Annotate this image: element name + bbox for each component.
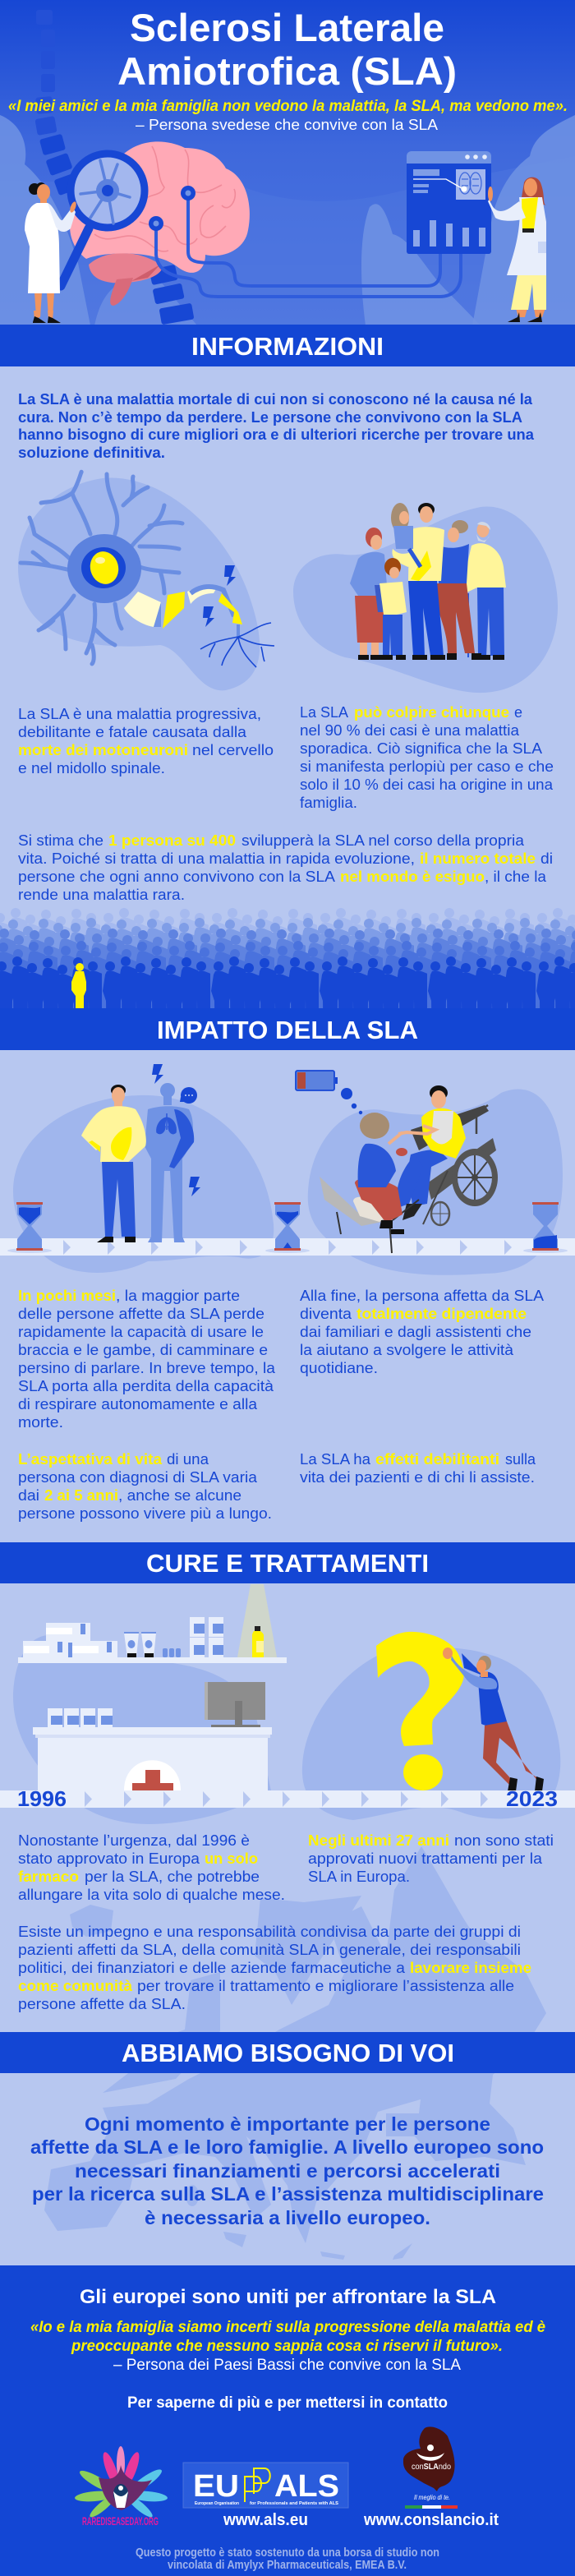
text block: one drug approved: un solo xyxy=(205,1850,258,1867)
text block: progressive disease: debilitante e fatale causata dalla xyxy=(18,724,247,740)
text block: intro: hanno bisogno di cure migliori ora e di ulteriori ricerche per trovare una xyxy=(18,426,535,443)
panel: footer xyxy=(0,2265,575,2576)
text block: 1 in 400: , il che la xyxy=(485,869,547,885)
woman left xyxy=(350,528,388,660)
text block: debilitating effects: vita dei pazienti e di chi li assiste. xyxy=(300,1469,535,1486)
text block: 1 in 400: svilupperà la SLA nel corso della propria xyxy=(242,832,525,849)
illustration: family xyxy=(293,503,558,693)
text block: shared commitment: Esiste un impegno e una responsabilità condivisa da parte dei gruppi di xyxy=(18,1924,521,1940)
text block: shared commitment xyxy=(18,1924,531,2012)
title xyxy=(117,6,457,93)
text block: 1 in 400: di xyxy=(540,850,553,867)
text block: life expectancy: di una xyxy=(167,1451,209,1468)
text block: progressive disease: morte dei motoneuroni xyxy=(18,742,188,758)
logo: EUpALS xyxy=(183,2463,348,2508)
heading: Abbiamo bisogno di voi: ABBIAMO BISOGNO DI VOI xyxy=(122,2039,454,2067)
text block: anyone can be affected: solo il 10 % dei casi ha origine in una xyxy=(300,776,554,793)
links xyxy=(223,2511,499,2529)
text block: within months: delle persone affette da SLA perde xyxy=(18,1306,264,1322)
logo: EUpALS: European Organisation xyxy=(195,2501,239,2506)
icon: hourglass middle xyxy=(265,1202,310,1253)
disclaimer: vincolata di Amylyx Pharmaceuticals, EMEA B.V. xyxy=(168,2559,407,2572)
quote: Dutch person: «Io e la mia famiglia siamo incerti sulla progressione della malattia ed è xyxy=(30,2319,545,2336)
illustration: crowd silhouettes xyxy=(0,908,575,1011)
quote: Swedish person: – Persona svedese che convive con la SLA xyxy=(136,116,439,133)
quote: Dutch person: – Persona dei Paesi Bassi che convive con la SLA xyxy=(113,2357,461,2374)
text block: life expectancy: L’aspettativa di vita xyxy=(18,1451,163,1468)
text block: within months: SLA porta alla perdita della capacità xyxy=(18,1378,274,1394)
text block: call to action: per la ricerca sulla SLA e l’assistenza multidisciplinare xyxy=(32,2183,544,2205)
links: www.conslancio.it xyxy=(363,2511,499,2529)
text block: totally dependent: dai familiari e dagli assistenti che xyxy=(300,1324,531,1340)
text block: life expectancy: dai xyxy=(18,1487,39,1504)
text block: 1 in 400 xyxy=(18,832,553,903)
title: Sclerosi Laterale xyxy=(130,6,444,49)
logo: conSLAndo xyxy=(403,2426,458,2509)
text block: one drug approved: per la SLA, che potrebbe xyxy=(85,1869,260,1885)
text block: life expectancy: , anche se alcune xyxy=(118,1487,242,1504)
text block: progressive disease xyxy=(18,706,274,776)
quote: Dutch person: preoccupante che nessuno sappia cosa ci riservi il futuro». xyxy=(71,2338,503,2355)
text block: call to action xyxy=(30,2113,544,2228)
timeline band with years: 2023 xyxy=(506,1786,558,1811)
icon: ghost body with lungs xyxy=(145,1083,194,1242)
text block: shared commitment: persone affette da SLA. xyxy=(18,1996,186,2012)
text block: totally dependent xyxy=(300,1288,544,1376)
title: Amiotrofica (SLA) xyxy=(117,49,457,93)
text block: debilitating effects: effetti debilitanti xyxy=(375,1451,499,1468)
timeline band xyxy=(0,1238,575,1256)
logo: EUpALS: EU xyxy=(193,2469,239,2504)
text block: one drug approved: Nonostante l’urgenza, dal 1996 è xyxy=(18,1832,250,1849)
heading: Abbiamo bisogno di voi xyxy=(0,2032,575,2073)
timeline band with years: 1996 xyxy=(17,1786,67,1811)
footer heading: Gli europei sono uniti per affrontare la SLA xyxy=(80,2286,496,2308)
spotlight xyxy=(237,1584,277,1657)
illustration: impact blobs and timeline xyxy=(0,1064,575,1275)
text block: life expectancy: 2 ai 5 anni xyxy=(44,1487,118,1504)
boy xyxy=(375,558,407,660)
text block: progressive disease: nel cervello xyxy=(192,742,274,758)
text block: one drug approved: allungare la vita solo di qualche mese. xyxy=(18,1887,285,1903)
text block: 1 in 400: Si stima che xyxy=(18,832,104,849)
icon: wheelchair with patient and caregiver xyxy=(320,1085,498,1253)
text block: anyone can be affected xyxy=(300,704,554,811)
text block: totally dependent: la aiutano a svolgere le attività xyxy=(300,1342,514,1358)
disclaimer: Questo progetto è stato sostenuto da una borsa di studio non xyxy=(136,2546,439,2560)
text block: within months: In pochi mesi xyxy=(18,1288,116,1304)
text block: one drug approved xyxy=(18,1832,285,1903)
quote: Swedish person xyxy=(8,97,568,133)
text block: within months: rapidamente la capacità di usare le xyxy=(18,1324,264,1340)
icon: highlighted person xyxy=(71,963,86,1008)
text block: within months: di respirare autonomamente e alla xyxy=(18,1396,258,1412)
logo: EUpALS: for Professionals and Patients with ALS xyxy=(250,2501,339,2506)
quote: Dutch person xyxy=(30,2319,545,2374)
text block: last 27 years: SLA in Europa. xyxy=(308,1869,410,1885)
text block: one drug approved: stato approvato in Europa xyxy=(18,1850,200,1867)
text block: progressive disease: La SLA è una malattia progressiva, xyxy=(18,706,261,722)
text block: totally dependent: quotidiane. xyxy=(300,1360,378,1376)
text block: totally dependent: Alla fine, la persona affetta da SLA xyxy=(300,1288,544,1304)
text block: within months: braccia e le gambe, di camminare e xyxy=(18,1342,268,1358)
text block: intro: soluzione definitiva. xyxy=(18,445,165,461)
text block: debilitating effects: La SLA ha xyxy=(300,1451,371,1468)
timeline band with years xyxy=(0,1786,575,1811)
icon: spine xyxy=(34,10,194,325)
icon: hourglass start xyxy=(7,1202,52,1253)
text block: within months: persino di parlare. In breve tempo, la xyxy=(18,1360,276,1376)
old man xyxy=(465,522,506,660)
logo: rare disease day: RAREDISEASEDAY.ORG xyxy=(82,2514,159,2528)
text block: anyone can be affected: nel 90 % dei casi è una malattia xyxy=(300,722,520,739)
text block: 1 in 400: vita. Poiché si tratta di una malattia in rapida evoluzione, xyxy=(18,850,415,867)
panel: section background xyxy=(0,325,575,2265)
icon: brain xyxy=(70,141,250,306)
text block: anyone can be affected: e xyxy=(514,704,522,721)
icon: doctor right xyxy=(488,177,552,322)
illustration: pharmacy and timeline xyxy=(0,1584,575,1824)
text block: one drug approved: farmaco xyxy=(18,1869,79,1885)
text block: last 27 years xyxy=(308,1832,554,1885)
text block: shared commitment: pazienti affetti da SLA, della comunità SLA in generale, dei responsabili xyxy=(18,1942,521,1958)
heading: Informazioni xyxy=(0,325,575,366)
text block: 1 in 400: nel mondo è esiguo xyxy=(340,869,485,885)
icon: lightning bolts xyxy=(152,1064,200,1196)
text block: shared commitment: come comunità xyxy=(18,1978,133,1994)
text block: anyone can be affected: si manifesta perlopiù per caso e che xyxy=(300,758,554,775)
logo: conSLAndo: conSLAndo xyxy=(412,2463,451,2472)
logo: conSLAndo: Il meglio di te. xyxy=(414,2494,450,2501)
text block: anyone can be affected: può colpire chiunque xyxy=(354,704,509,721)
text block: call to action: è necessaria a livello europeo. xyxy=(145,2207,430,2228)
text block: debilitating effects: sulla xyxy=(505,1451,536,1468)
text block: last 27 years: Negli ultimi 27 anni xyxy=(308,1832,449,1849)
icon: question mark xyxy=(376,1632,464,1790)
icon: sensor wires xyxy=(149,186,461,297)
text block: life expectancy: persone possono vivere più a lungo. xyxy=(18,1505,272,1522)
text block: last 27 years: approvati nuovi trattamenti per la xyxy=(308,1850,543,1867)
illustration: damaged neuron xyxy=(18,472,274,690)
text block: life expectancy: persona con diagnosi di SLA varia xyxy=(18,1469,258,1486)
woman right xyxy=(431,520,481,660)
counter with monitor xyxy=(33,1682,272,1790)
text block: within months: , la maggior parte xyxy=(116,1288,240,1304)
icon: battery and thought bubbles xyxy=(296,1071,362,1114)
text block: shared commitment: politici, dei finanziatori e delle aziende farmaceutiche a xyxy=(18,1960,406,1976)
icon: data monitor panel xyxy=(407,151,491,254)
icon: man standing xyxy=(81,1085,146,1242)
text block: debilitating effects xyxy=(300,1451,536,1486)
panel: header xyxy=(0,0,575,325)
text block: totally dependent: totalmente dipendente xyxy=(356,1306,527,1322)
text block: totally dependent: diventa xyxy=(300,1306,352,1322)
contact heading: Per saperne di più e per mettersi in contatto xyxy=(127,2394,448,2412)
text block: 1 in 400: 1 persona su 400 xyxy=(108,832,236,849)
text block: 1 in 400: il numero totale xyxy=(420,850,536,867)
icon: doctor left xyxy=(25,182,77,323)
heading: Informazioni: INFORMAZIONI xyxy=(191,332,384,361)
heading: Cure e trattamenti xyxy=(0,1542,575,1583)
background leaves xyxy=(0,115,575,325)
father and girl xyxy=(391,503,445,660)
logo: EUpALS: ALS xyxy=(274,2469,339,2504)
icon: speech bubble xyxy=(180,1087,197,1104)
text block: intro xyxy=(18,391,535,461)
icon: magnifier xyxy=(61,154,145,286)
text block: anyone can be affected: La SLA xyxy=(300,704,348,721)
heading: Cure e trattamenti: CURE E TRATTAMENTI xyxy=(146,1549,429,1578)
text block: call to action: affette da SLA e le loro famiglie. A livello europeo sono xyxy=(30,2136,544,2158)
text block: last 27 years: non sono stati xyxy=(454,1832,554,1849)
text block: 1 in 400: rende una malattia rara. xyxy=(18,887,185,903)
shelf with products xyxy=(18,1617,287,1663)
text block: shared commitment: per trovare il trattamento e migliorare l’assistenza alle xyxy=(137,1978,514,1994)
text block: anyone can be affected: sporadica. Ciò significa che la SLA xyxy=(300,740,542,757)
heading: Impatto della SLA xyxy=(0,1008,575,1050)
links: www.als.eu xyxy=(223,2511,308,2529)
text block: shared commitment: lavorare insieme xyxy=(410,1960,531,1976)
text block: intro: La SLA è una malattia mortale di cui non si conoscono né la causa né la xyxy=(18,391,533,408)
text block: call to action: necessari finanziamenti e percorsi accelerati xyxy=(75,2160,500,2182)
text block: within months xyxy=(18,1288,276,1431)
text block: progressive disease: e nel midollo spinale. xyxy=(18,760,165,776)
text block: 1 in 400: persone che ogni anno convivono con la SLA xyxy=(18,869,335,885)
text block: life expectancy xyxy=(18,1451,272,1522)
text block: call to action: Ogni momento è importante per le persone xyxy=(85,2113,490,2135)
heading: Impatto della SLA: IMPATTO DELLA SLA xyxy=(157,1016,418,1044)
text block: within months: morte. xyxy=(18,1414,63,1431)
logo: rare disease day xyxy=(75,2446,168,2528)
text block: anyone can be affected: famiglia. xyxy=(300,795,357,811)
map: Europe background xyxy=(44,1846,546,2260)
disclaimer xyxy=(136,2546,439,2572)
text block: intro: cura. Non c’è tempo da perdere. Le persone che convivono con la SLA xyxy=(18,409,522,426)
icon: man pushing question mark xyxy=(443,1647,544,1791)
icon: hourglass end xyxy=(523,1202,568,1253)
